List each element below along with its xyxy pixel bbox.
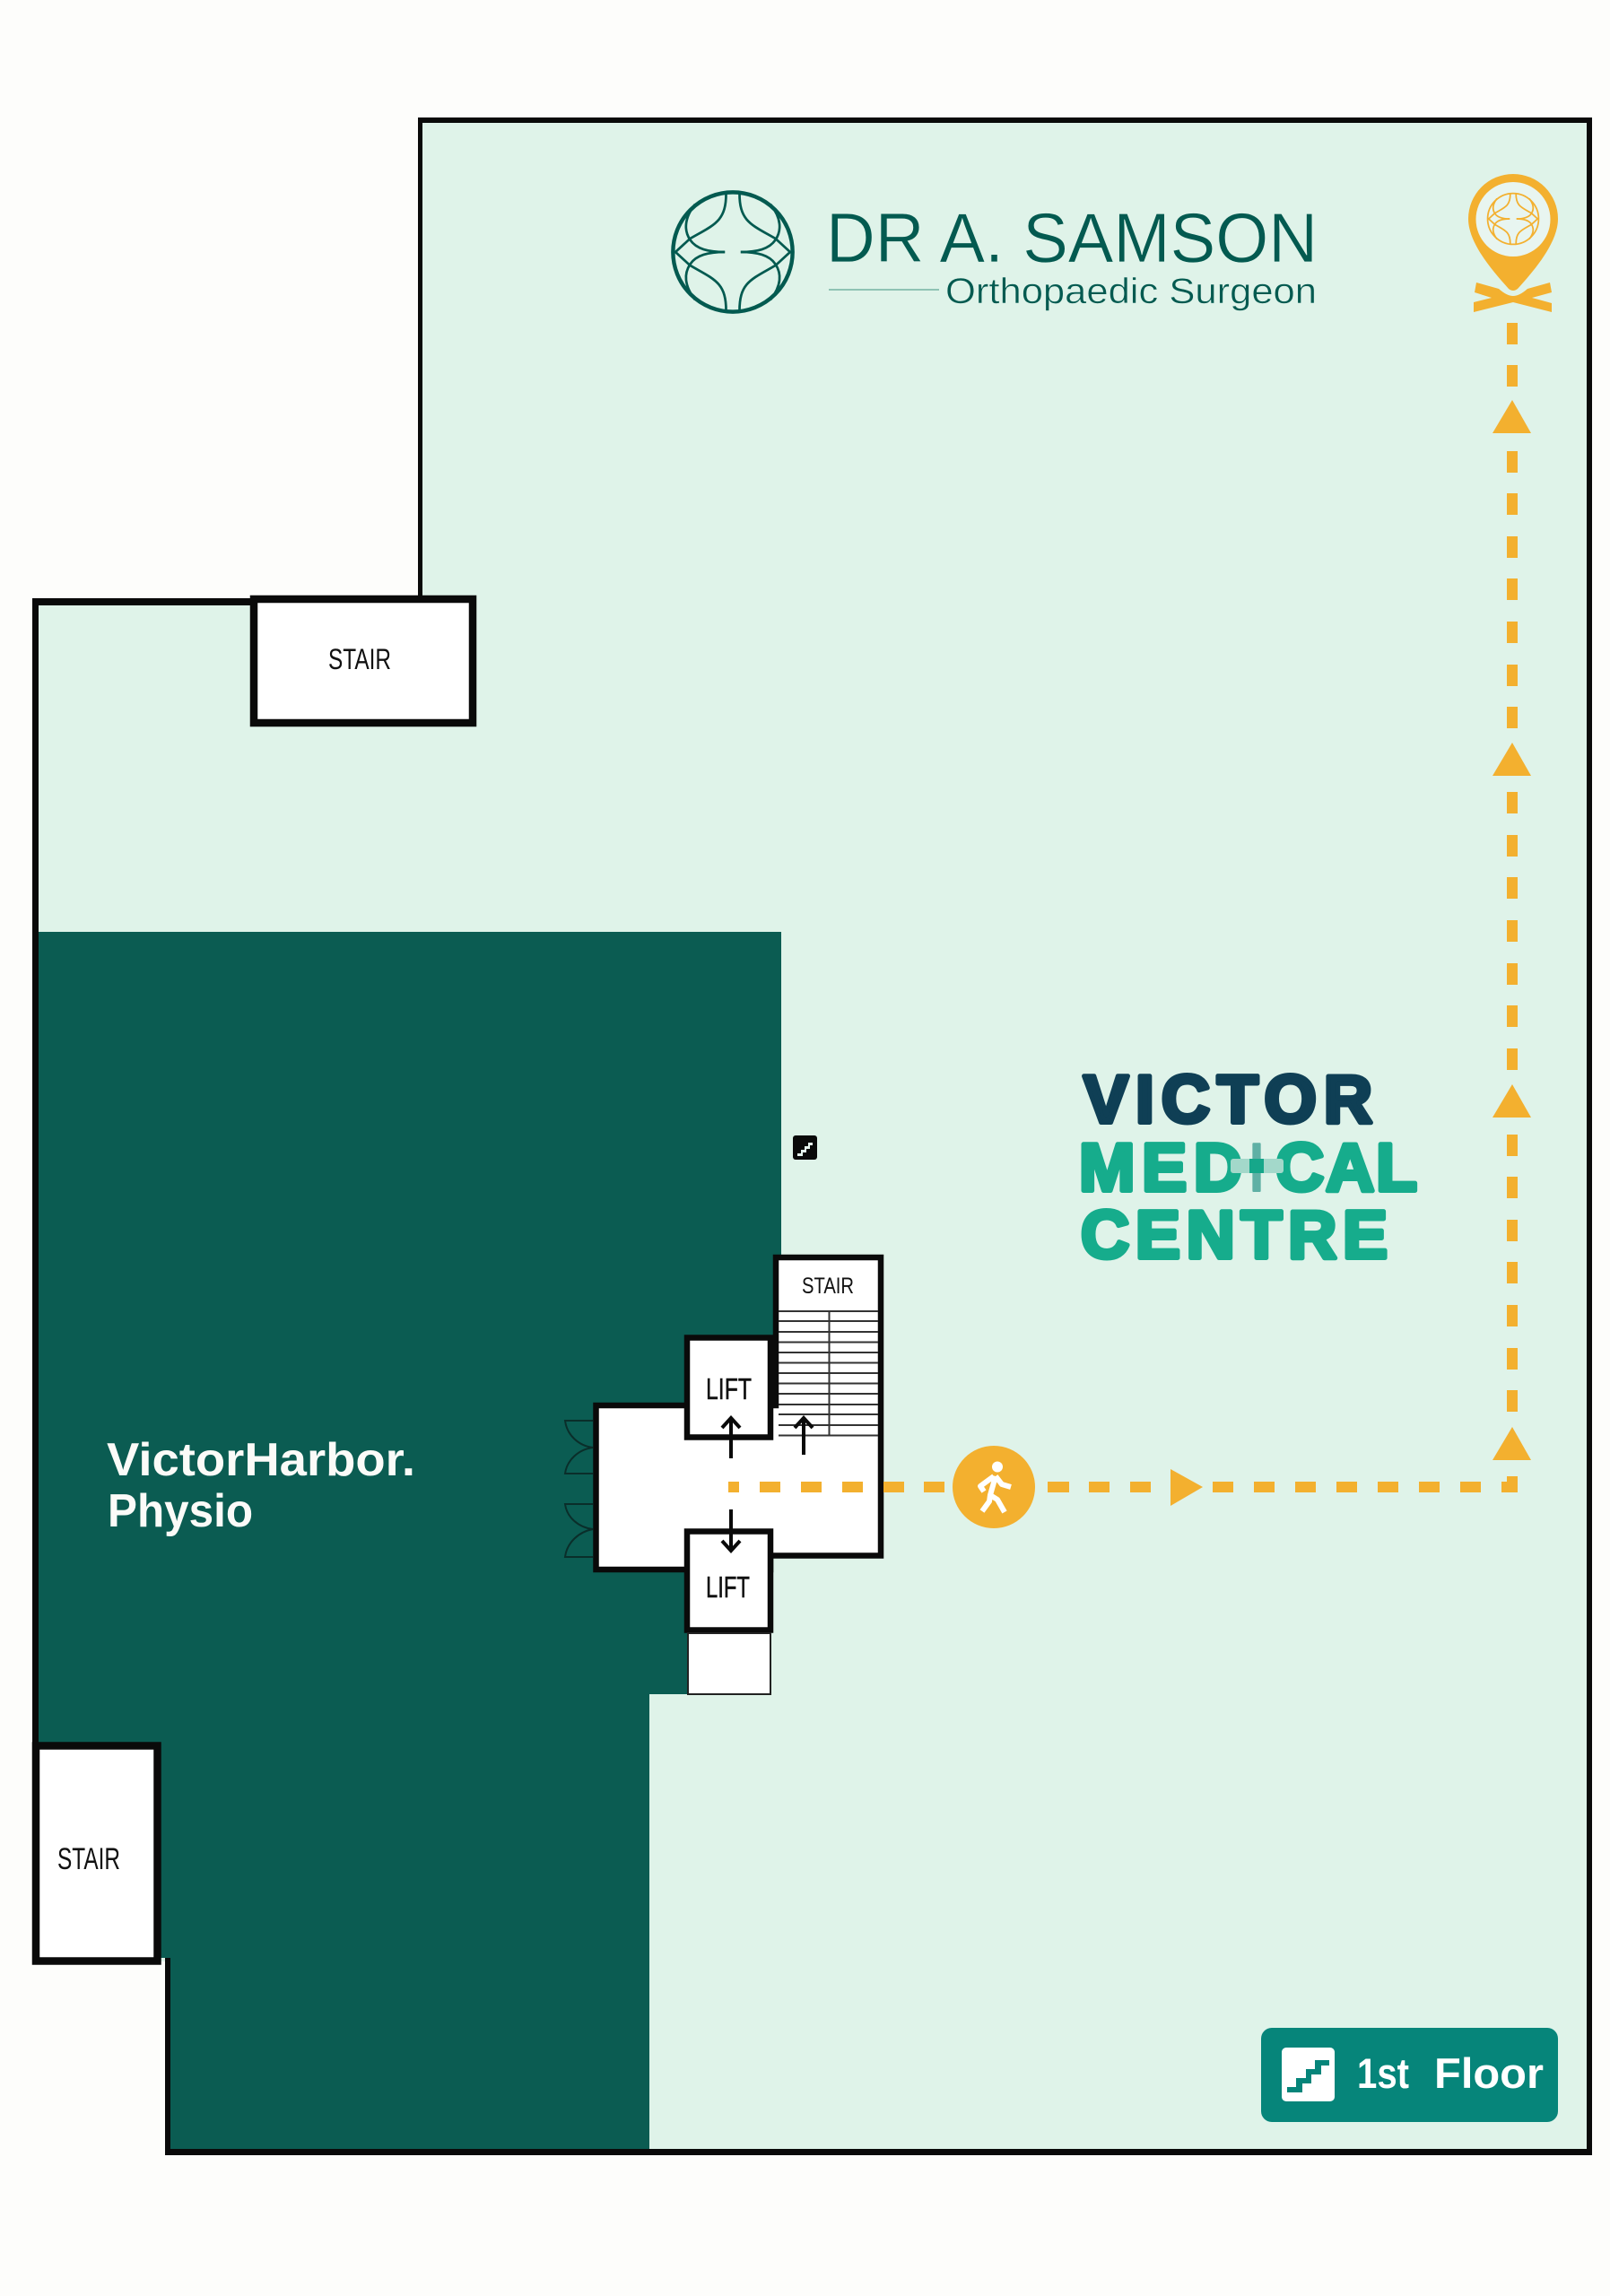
panel: upper lift — [687, 1338, 770, 1437]
subtitle rule — [829, 289, 939, 291]
heading: VictorHarbor Physio: VictorHarbor. — [107, 1434, 415, 1486]
arrow: route heading up 3 — [1493, 743, 1531, 776]
heading: VictorHarbor Physio: Physio — [108, 1485, 253, 1537]
doors: swing arcs — [565, 1421, 593, 1557]
icon: small stairs sign — [793, 1135, 817, 1160]
panel: lower left stair — [36, 1745, 158, 1961]
arrow: route heading up 4 — [1493, 400, 1531, 433]
logo line: Medical: MED — [1079, 1130, 1242, 1205]
subtitle: Orthopaedic Surgeon: Orthopaedic Surgeon — [945, 272, 1317, 311]
arrow: up the stairs — [795, 1418, 813, 1455]
floor label: Floor — [1434, 2049, 1544, 2097]
icon: destination pin — [1468, 174, 1558, 312]
icon: stairs — [1282, 2048, 1335, 2101]
stair treads — [779, 1311, 878, 1436]
panel: VictorHarbor Physio tenancy — [37, 932, 781, 2149]
arrow: route heading right — [1171, 1469, 1203, 1506]
panel: top stair: STAIR — [328, 643, 391, 675]
floor label — [1357, 2049, 1544, 2097]
badge: 1st floor — [1261, 2028, 1558, 2122]
logo line: Victor: VICTOR — [1083, 1062, 1372, 1137]
route: dashed vertical path — [1507, 323, 1518, 1412]
arrow: up to lift — [722, 1418, 740, 1458]
heading: VictorHarbor Physio — [107, 1434, 415, 1537]
title: Dr A. Samson: DR A. SAMSON — [826, 198, 1318, 277]
panel: lower lift — [687, 1532, 770, 1631]
panel: lower lift: LIFT — [706, 1570, 750, 1604]
panel: lobby and central stair core — [596, 1257, 881, 1570]
logo cross bar — [1231, 1159, 1284, 1173]
logo line: Medical — [1079, 1130, 1417, 1205]
floor label: 1st — [1357, 2049, 1409, 2097]
stair label: STAIR — [802, 1274, 854, 1299]
logo line: Medical: CAL — [1275, 1130, 1417, 1205]
arrow: down to lift — [722, 1509, 740, 1551]
logo line: Centre: CENTRE — [1081, 1196, 1388, 1272]
route: dashed horizontal path — [728, 1476, 1518, 1492]
logo: Dr A. Samson knee emblem — [673, 192, 793, 312]
pin emblem — [1488, 194, 1538, 244]
panel: small room below lift — [688, 1633, 770, 1694]
logo: Victor Medical Centre — [1079, 1062, 1417, 1272]
logo line: Medical: I — [1250, 1130, 1263, 1205]
panel: upper lift: LIFT — [706, 1372, 752, 1405]
panel: lower left stair: STAIR — [57, 1842, 120, 1876]
panel: top stair — [254, 599, 473, 723]
pin base ribbon — [1474, 283, 1552, 312]
arrow: route heading up 1 — [1493, 1427, 1531, 1460]
arrow: route heading up 2 — [1493, 1084, 1531, 1118]
icon: walking person — [953, 1446, 1035, 1528]
